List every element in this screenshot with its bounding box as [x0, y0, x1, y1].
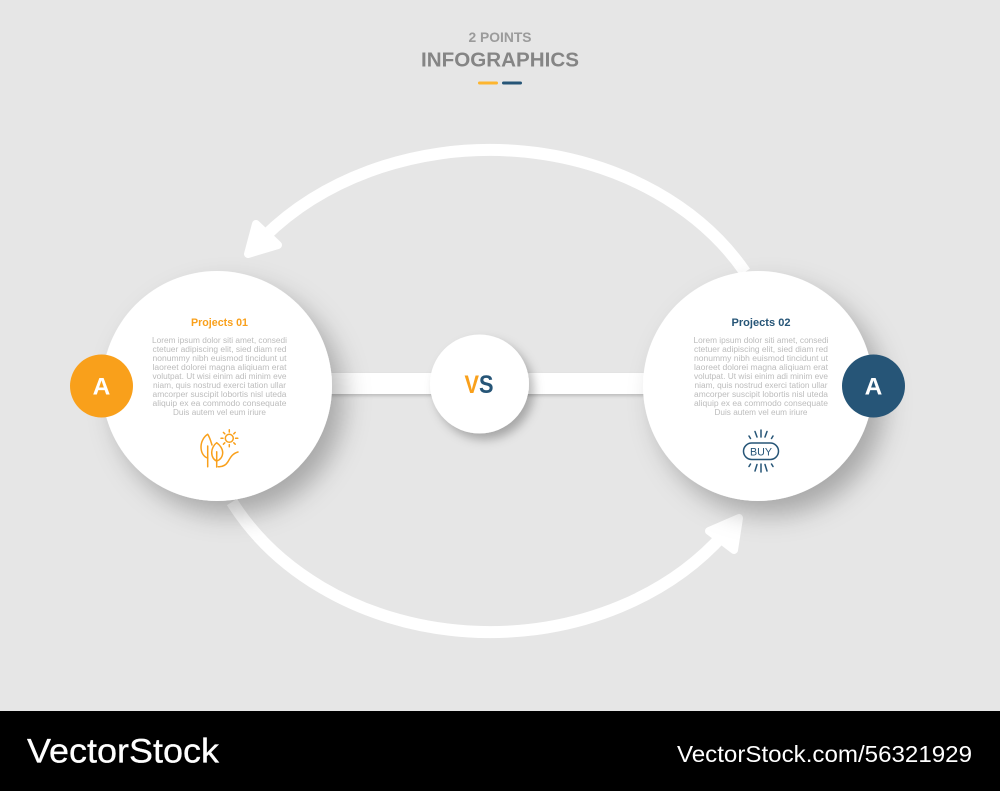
heading: projects 02: Projects 02	[732, 317, 790, 329]
body text left: nonummy nibh euismod tincidunt ut	[152, 354, 287, 363]
badge A left: A	[93, 374, 111, 400]
body text left: amcorper suscipit lobortis nisl uteda	[152, 390, 287, 399]
left circle	[102, 271, 332, 501]
body text left	[152, 336, 287, 417]
body text right: Lorem ipsum dolor siti amet, consedi	[694, 336, 829, 345]
body text left: laoreet dolorei magna aliqiuam erat	[152, 363, 287, 372]
body text right: volutpat. Ut wisi einim adi minim eve	[694, 372, 829, 381]
subtitle: 2 POINTS	[468, 29, 532, 45]
footer brand: VectorStock	[27, 732, 220, 770]
body text left: volutpat. Ut wisi einim adi minim eve	[152, 372, 287, 381]
badge A right	[842, 354, 905, 418]
heading: projects 01: Projects 01	[191, 317, 248, 329]
arrow: bottom arc left to right	[232, 502, 739, 632]
badge A right: A	[865, 374, 883, 400]
body text right: amcorper suscipit lobortis nisl uteda	[694, 390, 829, 399]
footer url: VectorStock.com/56321929	[677, 741, 972, 767]
right circle	[643, 271, 873, 501]
panel: projects 02	[643, 271, 905, 501]
arrow: top arc right to left	[248, 150, 745, 272]
body text left: Duis autem vel eum iriure	[173, 408, 267, 417]
body text right: laoreet dolorei magna aliqiuam erat	[694, 363, 829, 372]
icon: buy tag: BUY	[750, 446, 773, 458]
icon: buy tag	[744, 430, 778, 472]
connector bar	[328, 373, 648, 394]
heading: INFOGRAPHICS	[421, 48, 579, 72]
VS label: VS	[464, 371, 494, 399]
body text right: aliquip ex ea commodo consequate	[694, 399, 829, 408]
panel: projects 01	[70, 271, 332, 501]
accent dashes	[478, 82, 522, 84]
body text left: ctetuer adipiscing elit, sied diam red	[152, 345, 286, 354]
body text right: ctetuer adipiscing elit, sied diam red	[694, 345, 828, 354]
body text right: Duis autem vel eum iriure	[714, 408, 808, 417]
body text left: aliquip ex ea commodo consequate	[152, 399, 287, 408]
badge A left	[70, 354, 133, 418]
body text right: nonummy nibh euismod tincidunt ut	[694, 354, 829, 363]
body text left: niam, quis nostrud exerci tation ullar	[153, 381, 286, 390]
body text right: niam, quis nostrud exerci tation ullar	[694, 381, 828, 390]
body text left: Lorem ipsum dolor siti amet, consedi	[152, 336, 287, 345]
VS circle	[430, 334, 529, 434]
icon: leaves and sun	[201, 430, 238, 467]
footer band	[0, 711, 1000, 791]
body text right	[694, 336, 829, 417]
title block	[421, 29, 579, 84]
